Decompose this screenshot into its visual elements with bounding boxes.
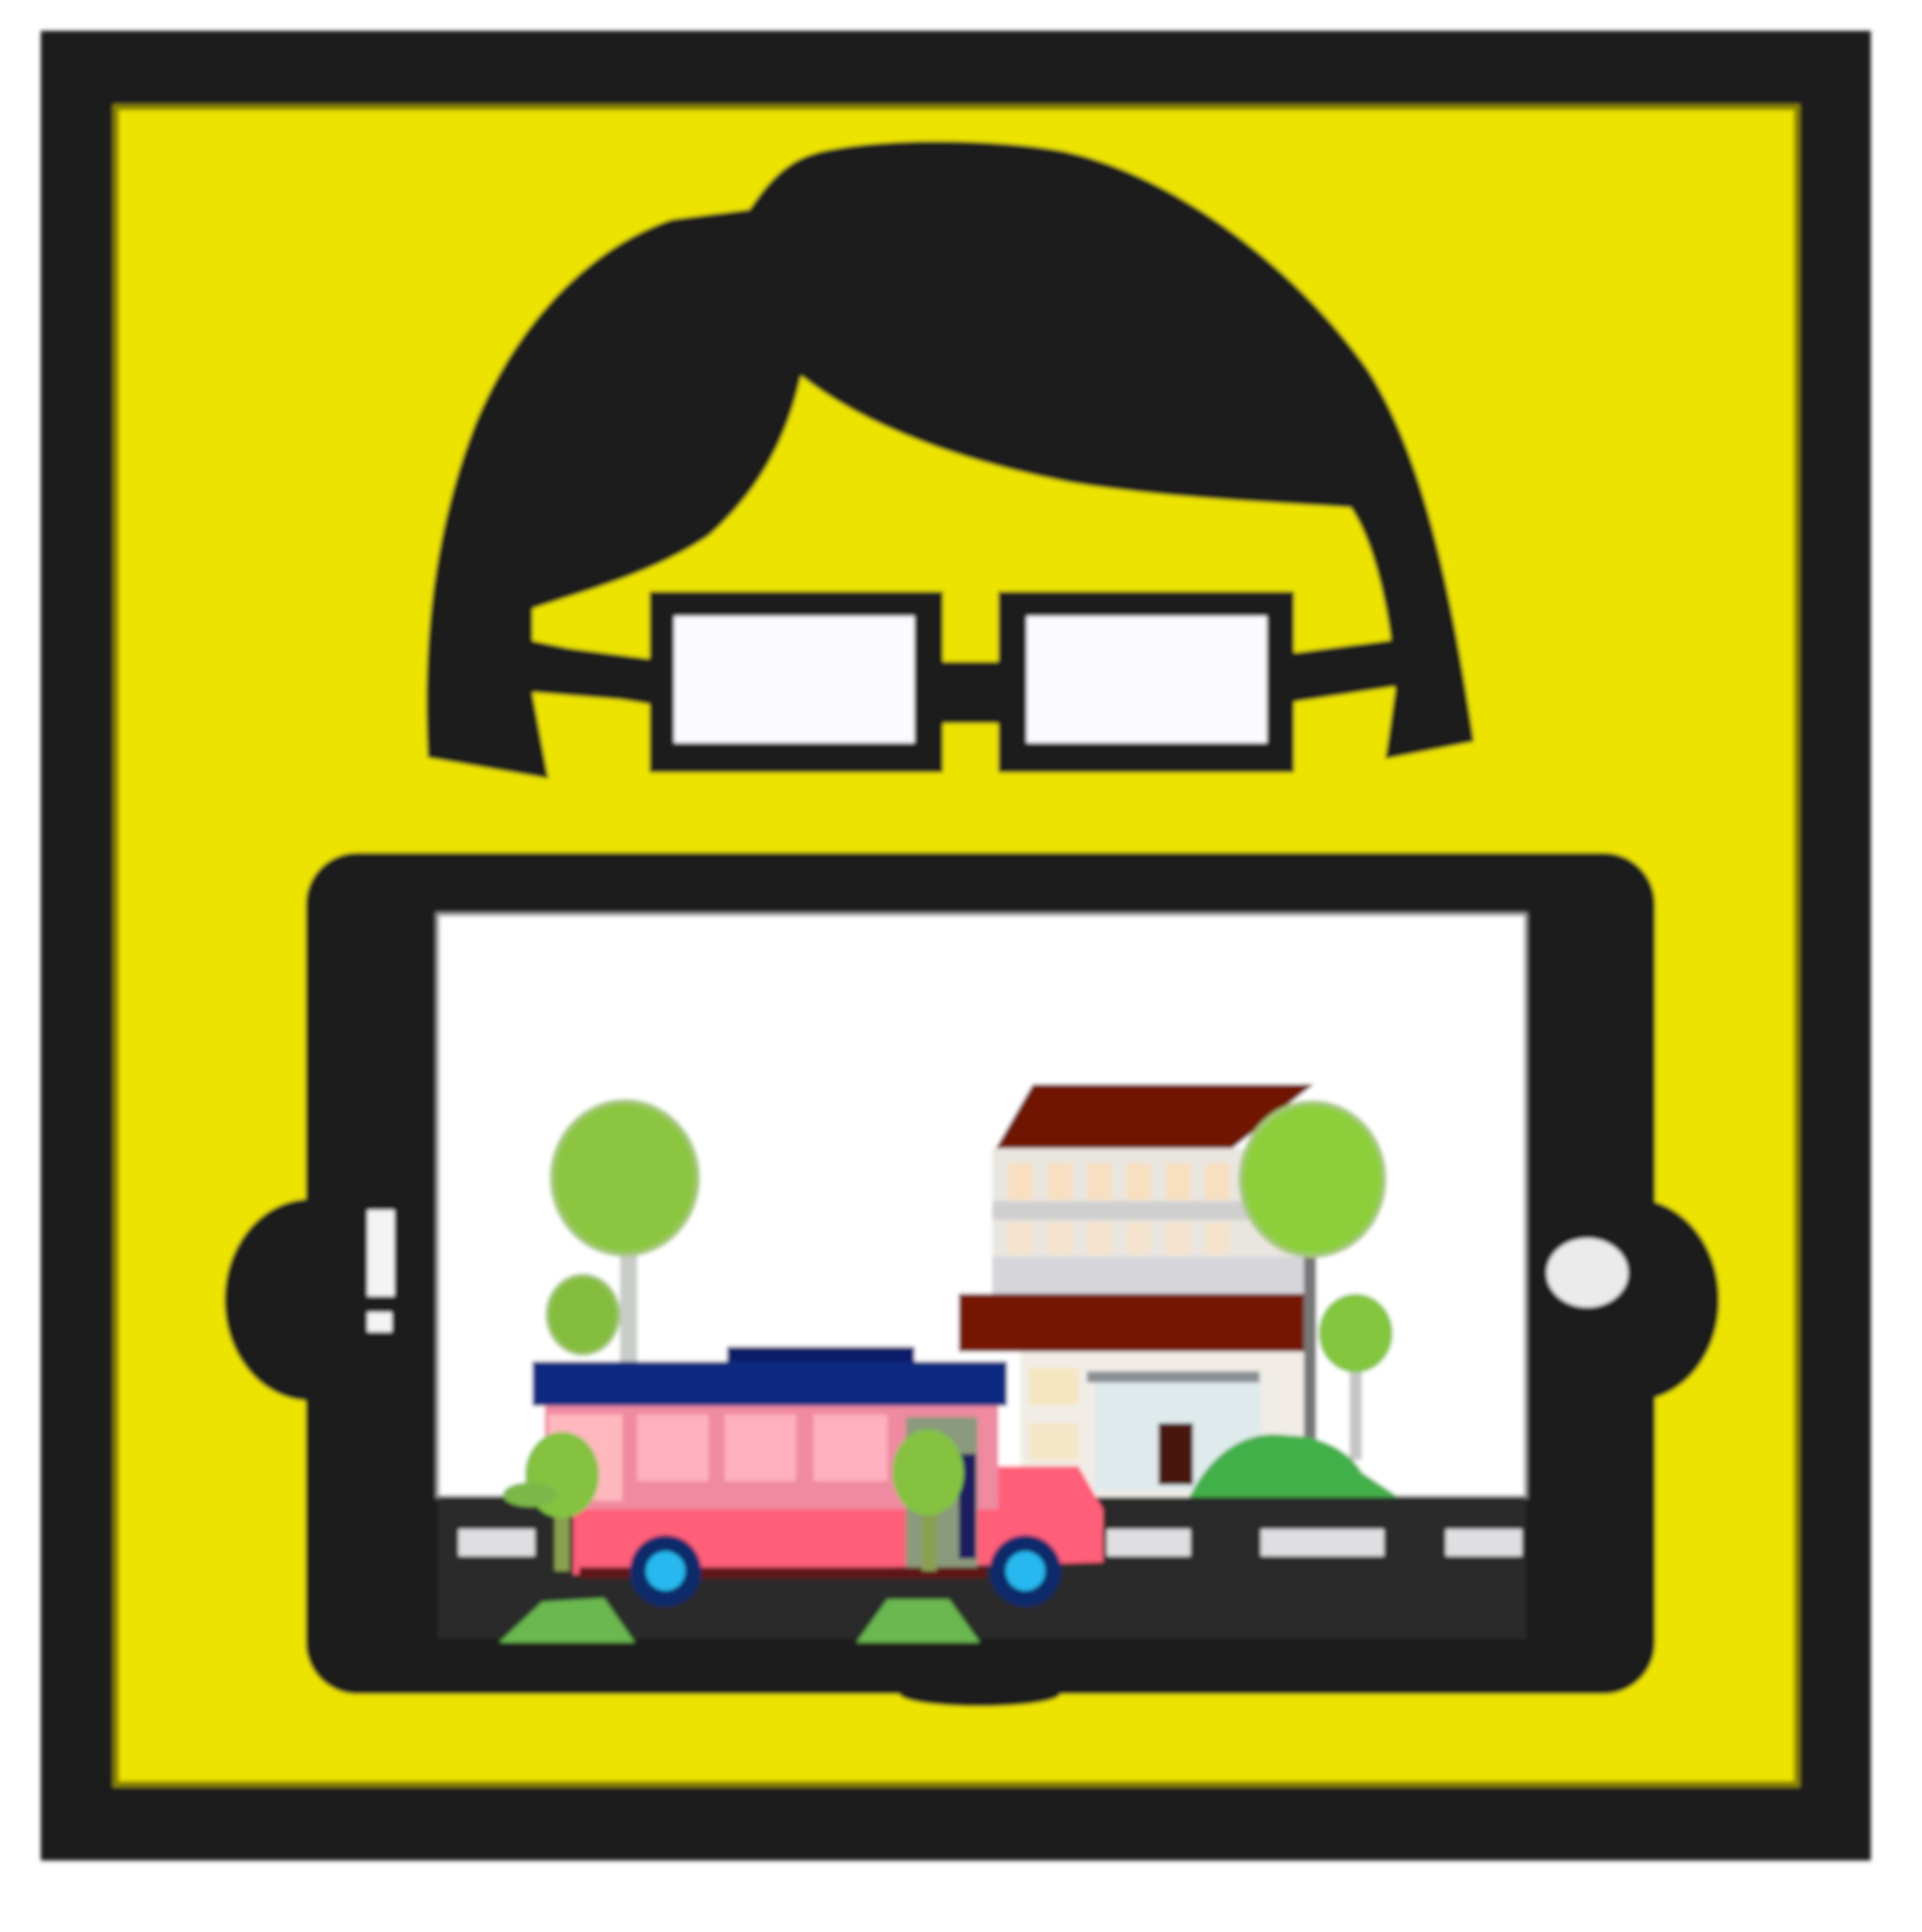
front wheel: [629, 1535, 701, 1607]
tire: [629, 1535, 701, 1607]
hub: [1006, 1551, 1045, 1591]
ground floor windows: [1029, 1368, 1078, 1405]
right tall tree: [1241, 1103, 1384, 1441]
trunk: [1349, 1356, 1362, 1460]
grey floor band 1: [992, 1201, 1307, 1220]
bus upper body: [544, 1406, 998, 1510]
chin: [900, 1682, 1060, 1707]
right temple arm: [1292, 639, 1405, 702]
bus window 3: [725, 1414, 796, 1481]
bus window 2: [637, 1414, 709, 1481]
bus window 4: [813, 1414, 887, 1481]
top roof: [995, 1084, 1313, 1148]
upper window band 2: [1008, 1223, 1230, 1255]
crown: [552, 1102, 697, 1255]
ground floor: [1021, 1352, 1310, 1497]
bus roof top: [727, 1347, 914, 1365]
lower roof: [959, 1293, 1316, 1352]
bus door dark post: [959, 1454, 976, 1558]
trunk: [1304, 1232, 1316, 1441]
bus door: [906, 1417, 978, 1571]
rear wheel: [990, 1535, 1061, 1607]
left lens: [674, 616, 914, 743]
foreground bush left: [499, 1598, 635, 1642]
trunk: [922, 1503, 937, 1571]
road: [438, 1497, 1526, 1639]
foreground tree right: [893, 1429, 963, 1571]
left lens frame: [649, 591, 943, 773]
glasses bridge: [937, 661, 1005, 724]
trunk: [555, 1503, 569, 1571]
base shrub: [503, 1482, 557, 1507]
upper window band 1: [1008, 1163, 1230, 1200]
icon: tablet: [225, 853, 1719, 1707]
bus lower body: [573, 1466, 1103, 1574]
road surface: [438, 1497, 1526, 1639]
crown: [1319, 1293, 1393, 1373]
tablet camera dot: [367, 1312, 392, 1332]
tablet speaker: [367, 1210, 394, 1296]
right ear: [1549, 1199, 1719, 1401]
shop awning: [1087, 1372, 1260, 1382]
crown: [1241, 1103, 1384, 1256]
right small tree: [1319, 1293, 1393, 1460]
upper floors: [992, 1148, 1307, 1296]
foreground bush right: [857, 1599, 979, 1642]
bus window 1: [548, 1414, 623, 1501]
left small tree: [547, 1275, 619, 1354]
left temple arm: [530, 643, 653, 705]
hub: [645, 1551, 685, 1591]
icon: hair: [426, 142, 1474, 778]
road dash 3: [1261, 1529, 1384, 1557]
shop front: [1095, 1374, 1261, 1491]
panel: yellow background: [116, 108, 1797, 1784]
road dash 1: [459, 1529, 535, 1557]
road dash 2: [1107, 1529, 1191, 1557]
tablet body: [306, 853, 1655, 1694]
left ear: [225, 1199, 397, 1401]
grey floor band 2: [992, 1257, 1307, 1293]
bus underside: [579, 1567, 986, 1578]
crown: [893, 1429, 963, 1516]
trunk: [620, 1244, 637, 1368]
bus: [532, 1347, 1103, 1607]
tablet home button: [1546, 1239, 1628, 1307]
right lens: [1027, 616, 1267, 743]
bush behind road: [1189, 1434, 1398, 1497]
bus roof: [532, 1361, 1007, 1406]
building: [959, 1084, 1316, 1497]
door: [1159, 1424, 1193, 1485]
tire: [990, 1535, 1061, 1607]
tablet screen sky: [438, 914, 1526, 1497]
right lens frame: [998, 591, 1294, 773]
icon: glasses: [530, 591, 1405, 773]
crown: [525, 1432, 599, 1518]
lower left window: [1029, 1424, 1078, 1460]
foreground tree left: [503, 1432, 599, 1571]
left tall tree: [552, 1102, 697, 1368]
road dash 4: [1446, 1529, 1522, 1557]
